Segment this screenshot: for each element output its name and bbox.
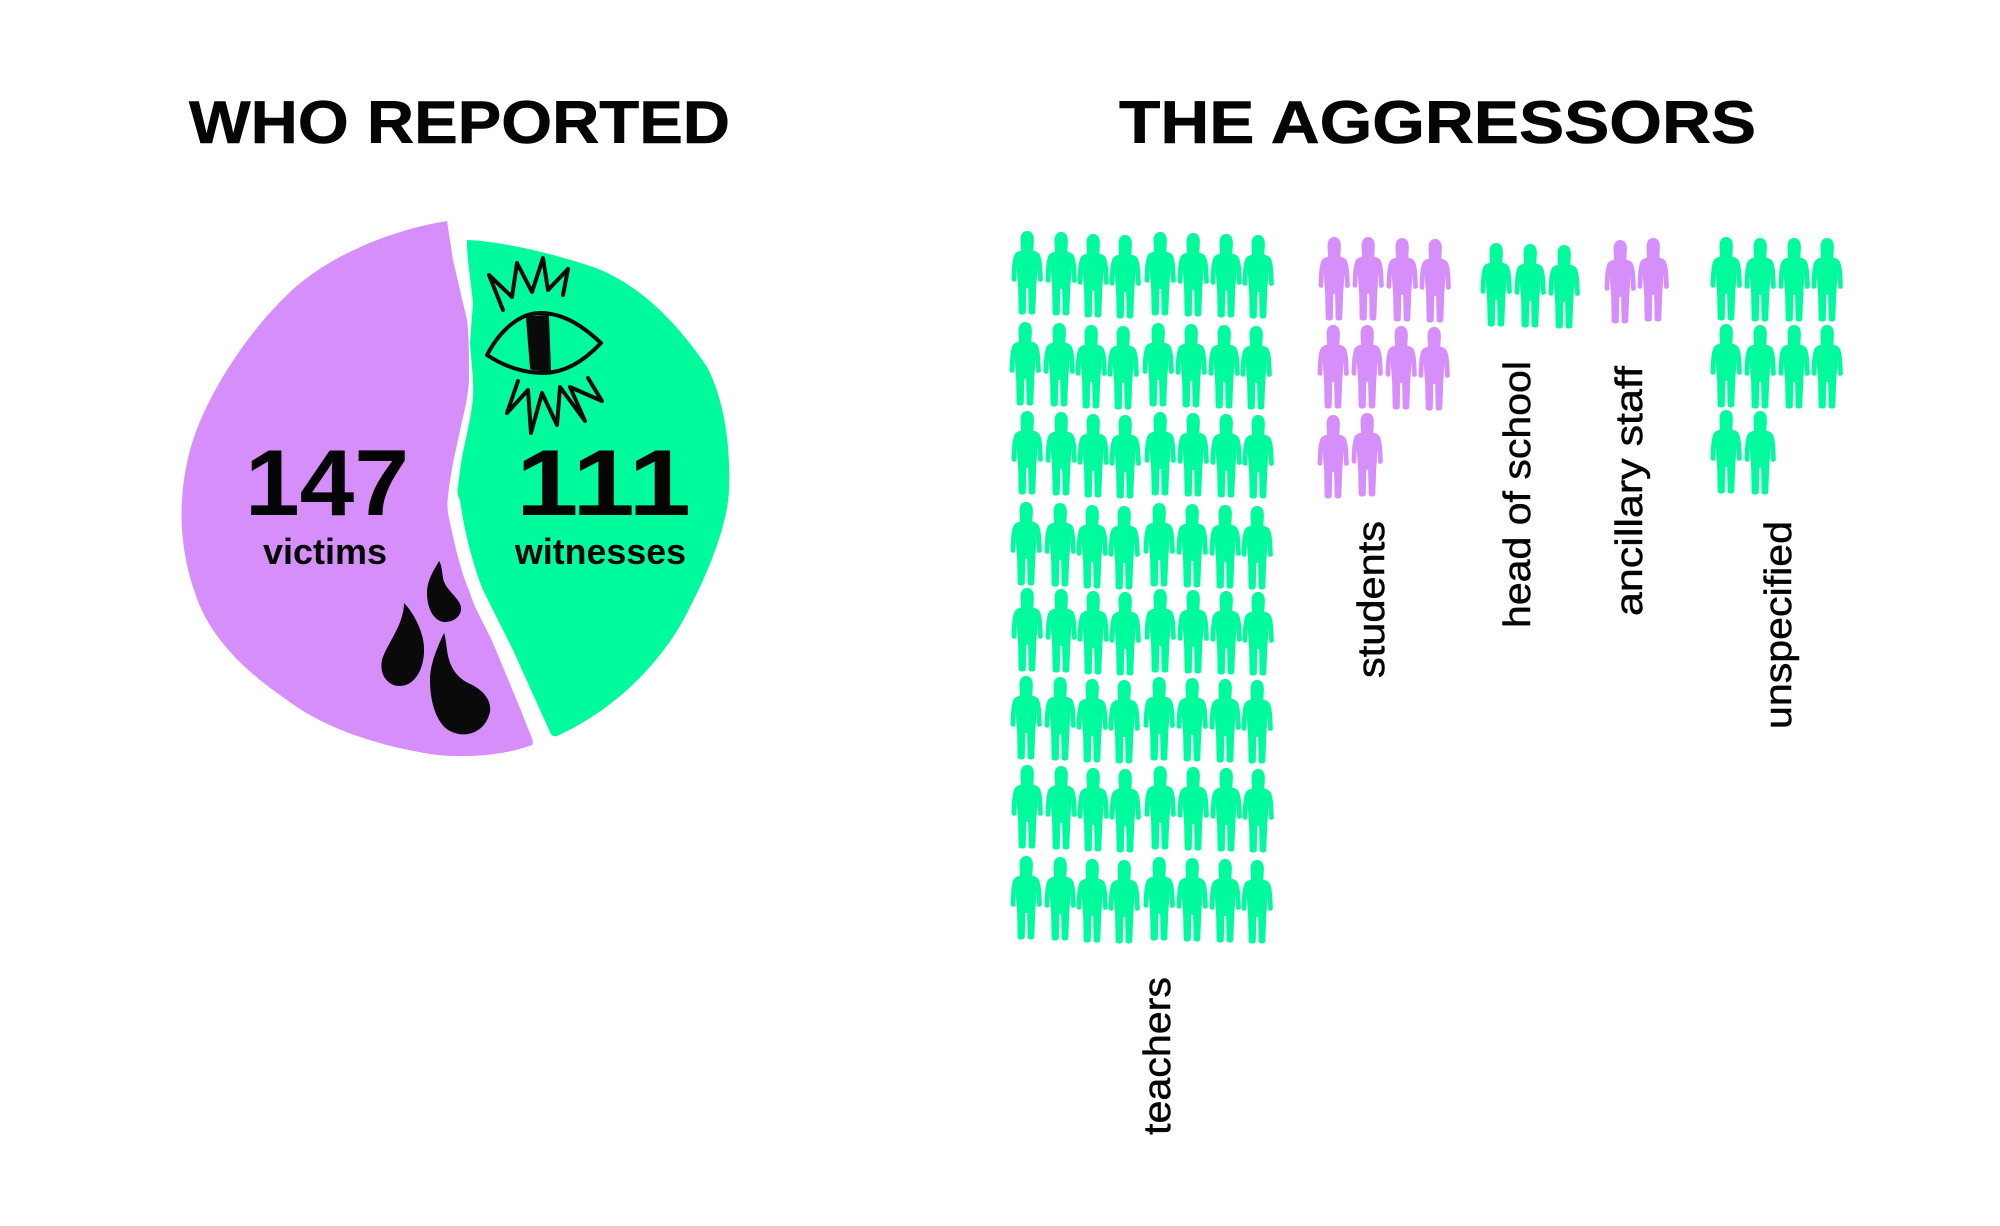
pie slice: witnesses bbox=[457, 240, 729, 736]
label: unspecified: unspecified bbox=[1758, 521, 1800, 729]
pictogram: teachers bbox=[1010, 231, 1274, 944]
pictogram: students bbox=[1318, 237, 1451, 499]
label: students: students bbox=[1351, 521, 1393, 678]
heading: the aggressors: THE AGGRESSORS bbox=[1119, 89, 1756, 156]
value: 147 victims: 147 bbox=[245, 430, 409, 535]
pictogram: unspecified bbox=[1711, 237, 1843, 495]
pictogram: head of school bbox=[1481, 243, 1580, 329]
pie slice: victims bbox=[182, 221, 533, 756]
pie chart: who reported bbox=[182, 221, 729, 756]
heading: who reported: WHO REPORTED bbox=[189, 89, 730, 156]
value: 111 witnesses: witnesses bbox=[514, 531, 686, 572]
label: ancillary staff: ancillary staff bbox=[1609, 366, 1651, 616]
label: head of school: head of school bbox=[1497, 361, 1539, 628]
pictogram: ancillary staff bbox=[1605, 238, 1669, 324]
value: 147 victims: victims bbox=[263, 531, 387, 572]
value: 111 witnesses bbox=[514, 430, 691, 572]
icon: eye with rays bbox=[487, 258, 602, 433]
label: teachers: teachers bbox=[1137, 977, 1179, 1135]
value: 111 witnesses: 111 bbox=[516, 430, 691, 535]
icon: tear drops bbox=[381, 561, 490, 734]
